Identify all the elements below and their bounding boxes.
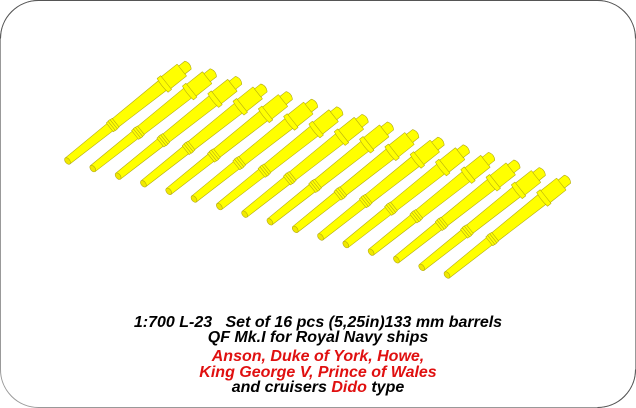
barrel 5 xyxy=(161,88,296,200)
caption line 3: Anson, Duke of York, Howe, xyxy=(211,348,424,365)
caption line 2: QF Mk.I for Royal Navy ships xyxy=(208,329,428,346)
barrel 10 xyxy=(288,126,423,238)
barrel 9 xyxy=(263,118,397,230)
caption line 5: and cruisers Dido type xyxy=(232,379,404,396)
barrel 2 xyxy=(86,65,220,177)
barrel 8 xyxy=(237,110,372,223)
barrel 15 xyxy=(414,164,549,276)
barrel 16 xyxy=(440,171,574,283)
barrel 4 xyxy=(136,80,271,192)
barrel 11 xyxy=(313,133,448,245)
barrel 3 xyxy=(111,72,245,185)
barrel 7 xyxy=(212,103,347,215)
caption xyxy=(134,314,502,396)
barrel 14 xyxy=(389,156,524,268)
barrel 6 xyxy=(187,95,321,207)
barrel 13 xyxy=(364,148,498,261)
barrel 12 xyxy=(339,141,473,253)
barrels set xyxy=(60,57,574,283)
barrel 1 xyxy=(60,57,195,169)
caption line 4: King George V, Prince of Wales xyxy=(199,364,437,381)
caption line 1: 1:700 L-23 Set of 16 pcs (5,25in)133 mm barrels xyxy=(134,314,502,331)
